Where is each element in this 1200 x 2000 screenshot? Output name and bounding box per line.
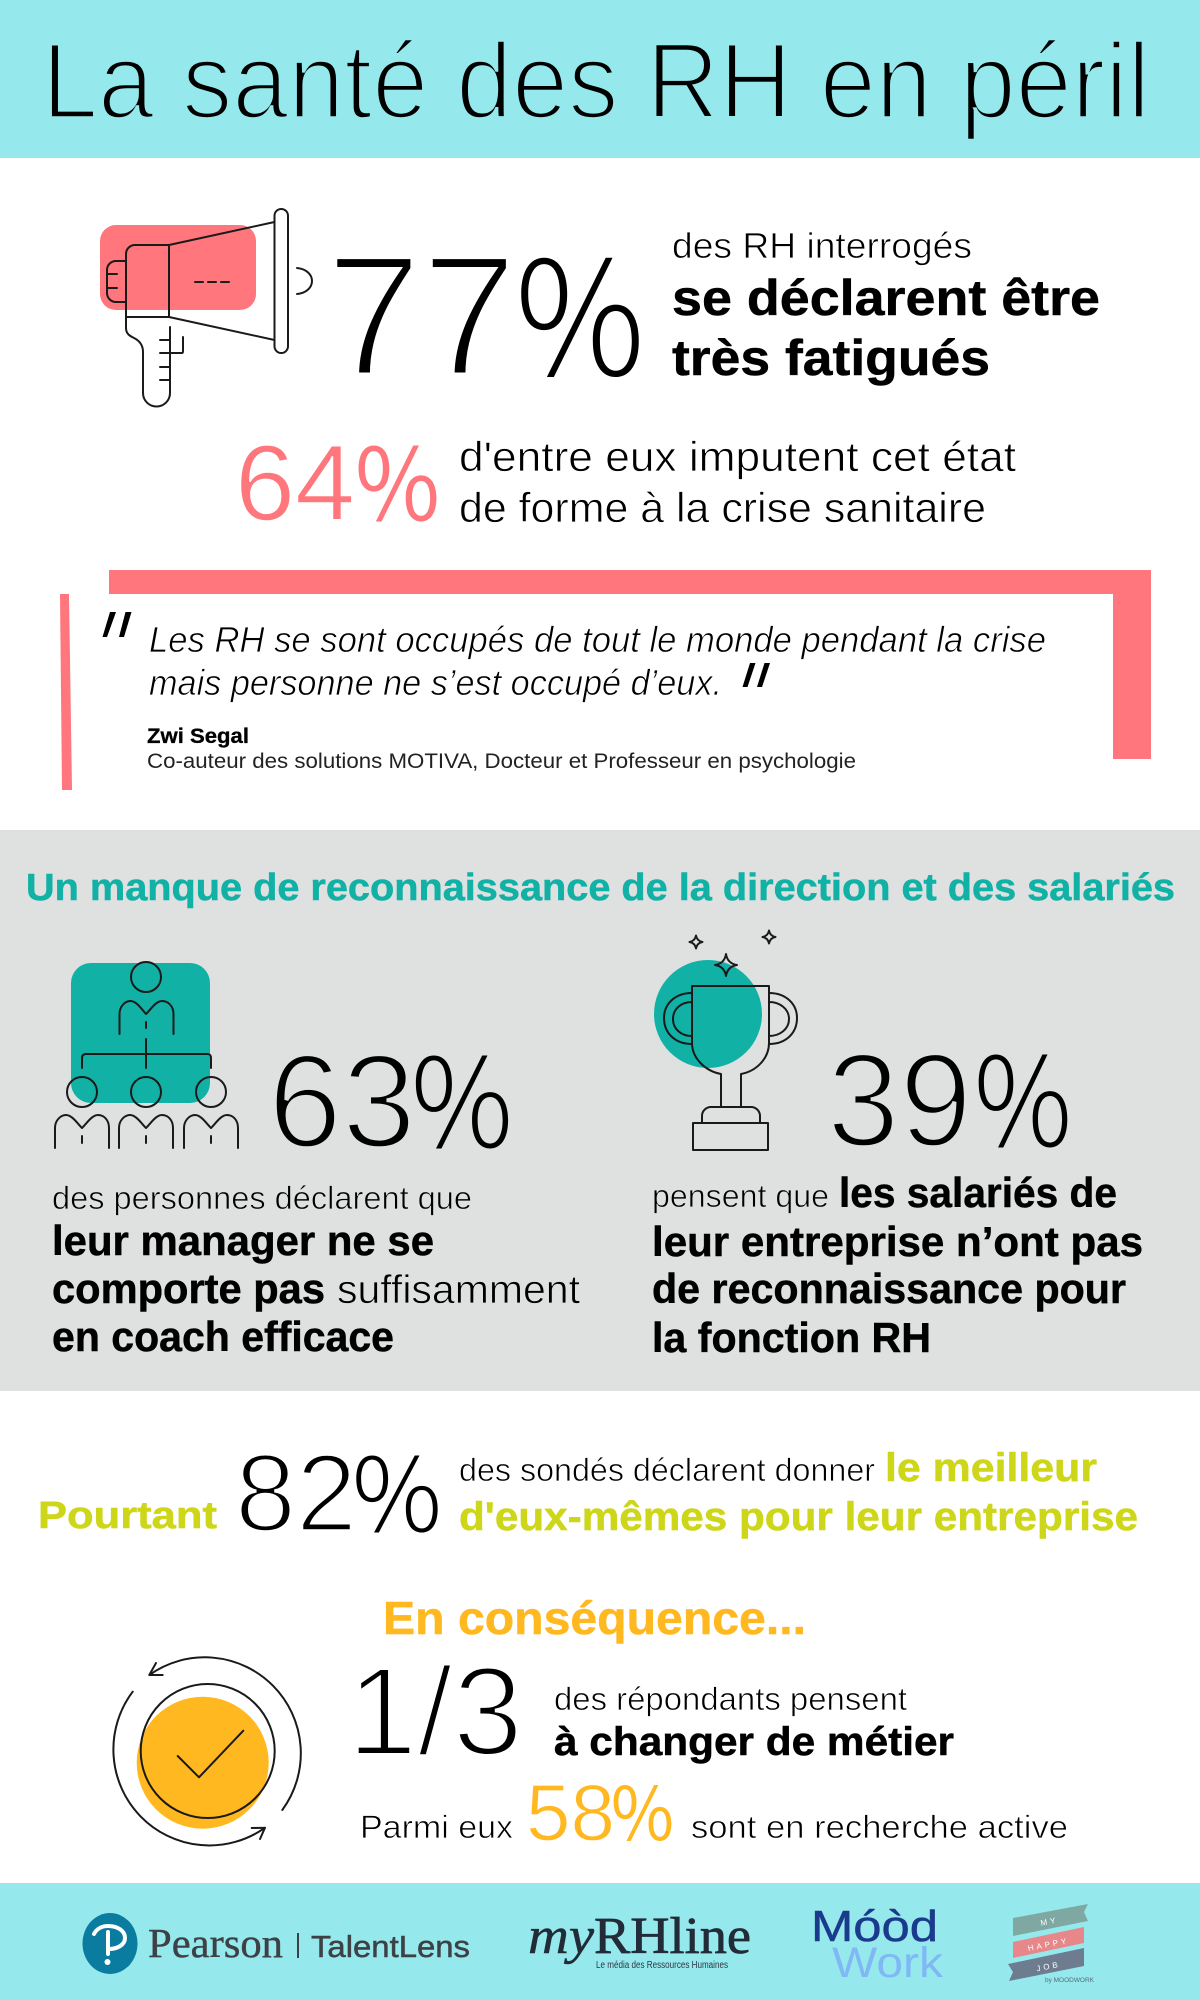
logo: My Happy Job: MY: [1040, 1915, 1059, 1928]
text: donner le meilleur: d'eux-mêmes pour leur entreprise: [459, 1495, 1138, 1539]
icon: org chart: [55, 962, 238, 1148]
statistic: 58%: [526, 1755, 674, 1862]
logo: My Happy Job: JOB: [1036, 1960, 1061, 1973]
statistic: 58%: 58: [526, 1768, 615, 1857]
icon: megaphone: [100, 209, 312, 406]
panel: footer logos: [0, 1883, 1200, 2000]
logo: Mood Work: Work: [832, 1939, 944, 1987]
icon: closing quotation mark: [742, 663, 770, 687]
title: La santé des RH en péril: [42, 20, 1150, 141]
quote author: Zwi Segal: [147, 725, 249, 748]
text: changer de métier: [554, 1681, 954, 1764]
text: se déclarent être très fatigués: [672, 270, 1100, 386]
logo: myRHline: [528, 1908, 751, 1971]
logo: myRHline: Le média des Ressources Humaines: [596, 1960, 728, 1971]
icon: opening quotation mark: [102, 612, 132, 637]
text: donner le meilleur: des sondés déclarent donner: [459, 1452, 875, 1488]
panel: consequences: [113, 1592, 1068, 1862]
panel: quote: [60, 570, 1151, 790]
text: des RH interrogés: des RH interrogés: [672, 225, 972, 266]
text: employees recognition: [652, 1169, 1143, 1361]
text: crise sanitaire: d'entre eux imputent cet état: [459, 433, 1016, 480]
text: changer de métier: à changer de métier: [554, 1720, 954, 1764]
section heading: Un manque de reconnaissance de la direction et des salariés: [26, 867, 1175, 909]
logo: Pearson TalentLens: Pearson: [148, 1920, 283, 1966]
statistic: 63%: 63: [268, 1028, 416, 1176]
header panel: [0, 0, 1200, 158]
text: employees recognition: leur entreprise n’ont pas: [652, 1218, 1143, 1265]
text: changer de métier: des répondants pensent: [554, 1681, 907, 1717]
text: employees recognition: la fonction RH: [652, 1314, 931, 1361]
logo: myRHline: my: [528, 1908, 595, 1965]
logo: Pearson TalentLens: TalentLens: [311, 1929, 470, 1964]
logo: My Happy Job: by MOODWORK: [1045, 1977, 1095, 1984]
statistic: 64%: [235, 404, 440, 549]
statistic: 39%: %: [974, 1004, 1072, 1182]
logo: Pearson TalentLens: [82, 1913, 470, 1974]
icon: trophy: [654, 930, 797, 1150]
text: employees recognition: de reconnaissance pour: [652, 1265, 1126, 1312]
statistic: 77%: [326, 192, 645, 421]
text: manager coach: suffisamment: [337, 1268, 580, 1312]
logo: Mood Work: Móòd: [811, 1902, 938, 1951]
statistic: 1/3: 1/3: [347, 1641, 523, 1782]
text: manager coach: en coach efficace: [52, 1313, 394, 1360]
statistic: 58%: %: [611, 1755, 674, 1862]
text: manager coach: [52, 1180, 580, 1360]
panel: commitment: [38, 1414, 1138, 1561]
panel: lack of recognition: [0, 830, 1200, 1391]
statistic: 63%: %: [411, 1005, 513, 1183]
logo: myRHline: RHline: [594, 1908, 751, 1965]
text: crise sanitaire: [459, 433, 1016, 531]
text: se déclarent être très fatigués: très fatigués: [672, 330, 990, 386]
text: manager coach: des personnes déclarent que: [52, 1180, 472, 1216]
text: employees recognition: les salariés de: [839, 1169, 1117, 1216]
text: donner le meilleur: [459, 1446, 1138, 1539]
statistic: 77%: 77: [326, 220, 517, 412]
quote text: mais personne ne s’est occupé d’eux.: [149, 662, 722, 703]
statistic: 39%: [827, 1004, 1072, 1182]
text: Parmi eux: Parmi eux: [360, 1809, 513, 1845]
statistic: 82%: [235, 1414, 442, 1561]
quote text: Les RH se sont occupés de tout le monde pendant la crise: [149, 619, 1046, 660]
logo: Mood Work: [811, 1902, 944, 1987]
heading: En conséquence: En conséquence...: [383, 1592, 806, 1644]
quote left bar: [60, 594, 72, 790]
statistic: 82%: 82: [235, 1432, 357, 1555]
text: se déclarent être très fatigués: se déclarent être: [672, 270, 1100, 326]
statistic: 64%: %: [355, 404, 440, 549]
text: employees recognition: pensent que: [652, 1178, 829, 1214]
text: crise sanitaire: de forme à la crise sanitaire: [459, 484, 986, 531]
logo: My Happy Job: HAPPY: [1027, 1936, 1070, 1953]
quote frame: [109, 570, 1151, 759]
statistic: 39%: 39: [827, 1027, 972, 1175]
text: manager coach: comporte pas: [52, 1265, 325, 1312]
statistic: 82%: %: [352, 1414, 442, 1561]
statistic: 77%: %: [515, 192, 645, 421]
text: recherche active: sont en recherche active: [691, 1809, 1068, 1845]
icon: check with arrows: [113, 1657, 301, 1845]
label: Pourtant: Pourtant: [38, 1495, 217, 1537]
statistic: 63%: [268, 1005, 513, 1183]
panel: fatigue statistics: [100, 192, 1100, 549]
text: manager coach: leur manager ne se: [52, 1217, 434, 1264]
statistic: 64%: 64: [235, 422, 355, 543]
quote text: [149, 619, 1046, 703]
text: donner le meilleur: le meilleur: [885, 1446, 1097, 1490]
author role: Co-auteur des solutions MOTIVA, Docteur et Professeur en psychologie: [147, 750, 856, 773]
logo: My Happy Job: [1008, 1904, 1095, 1984]
